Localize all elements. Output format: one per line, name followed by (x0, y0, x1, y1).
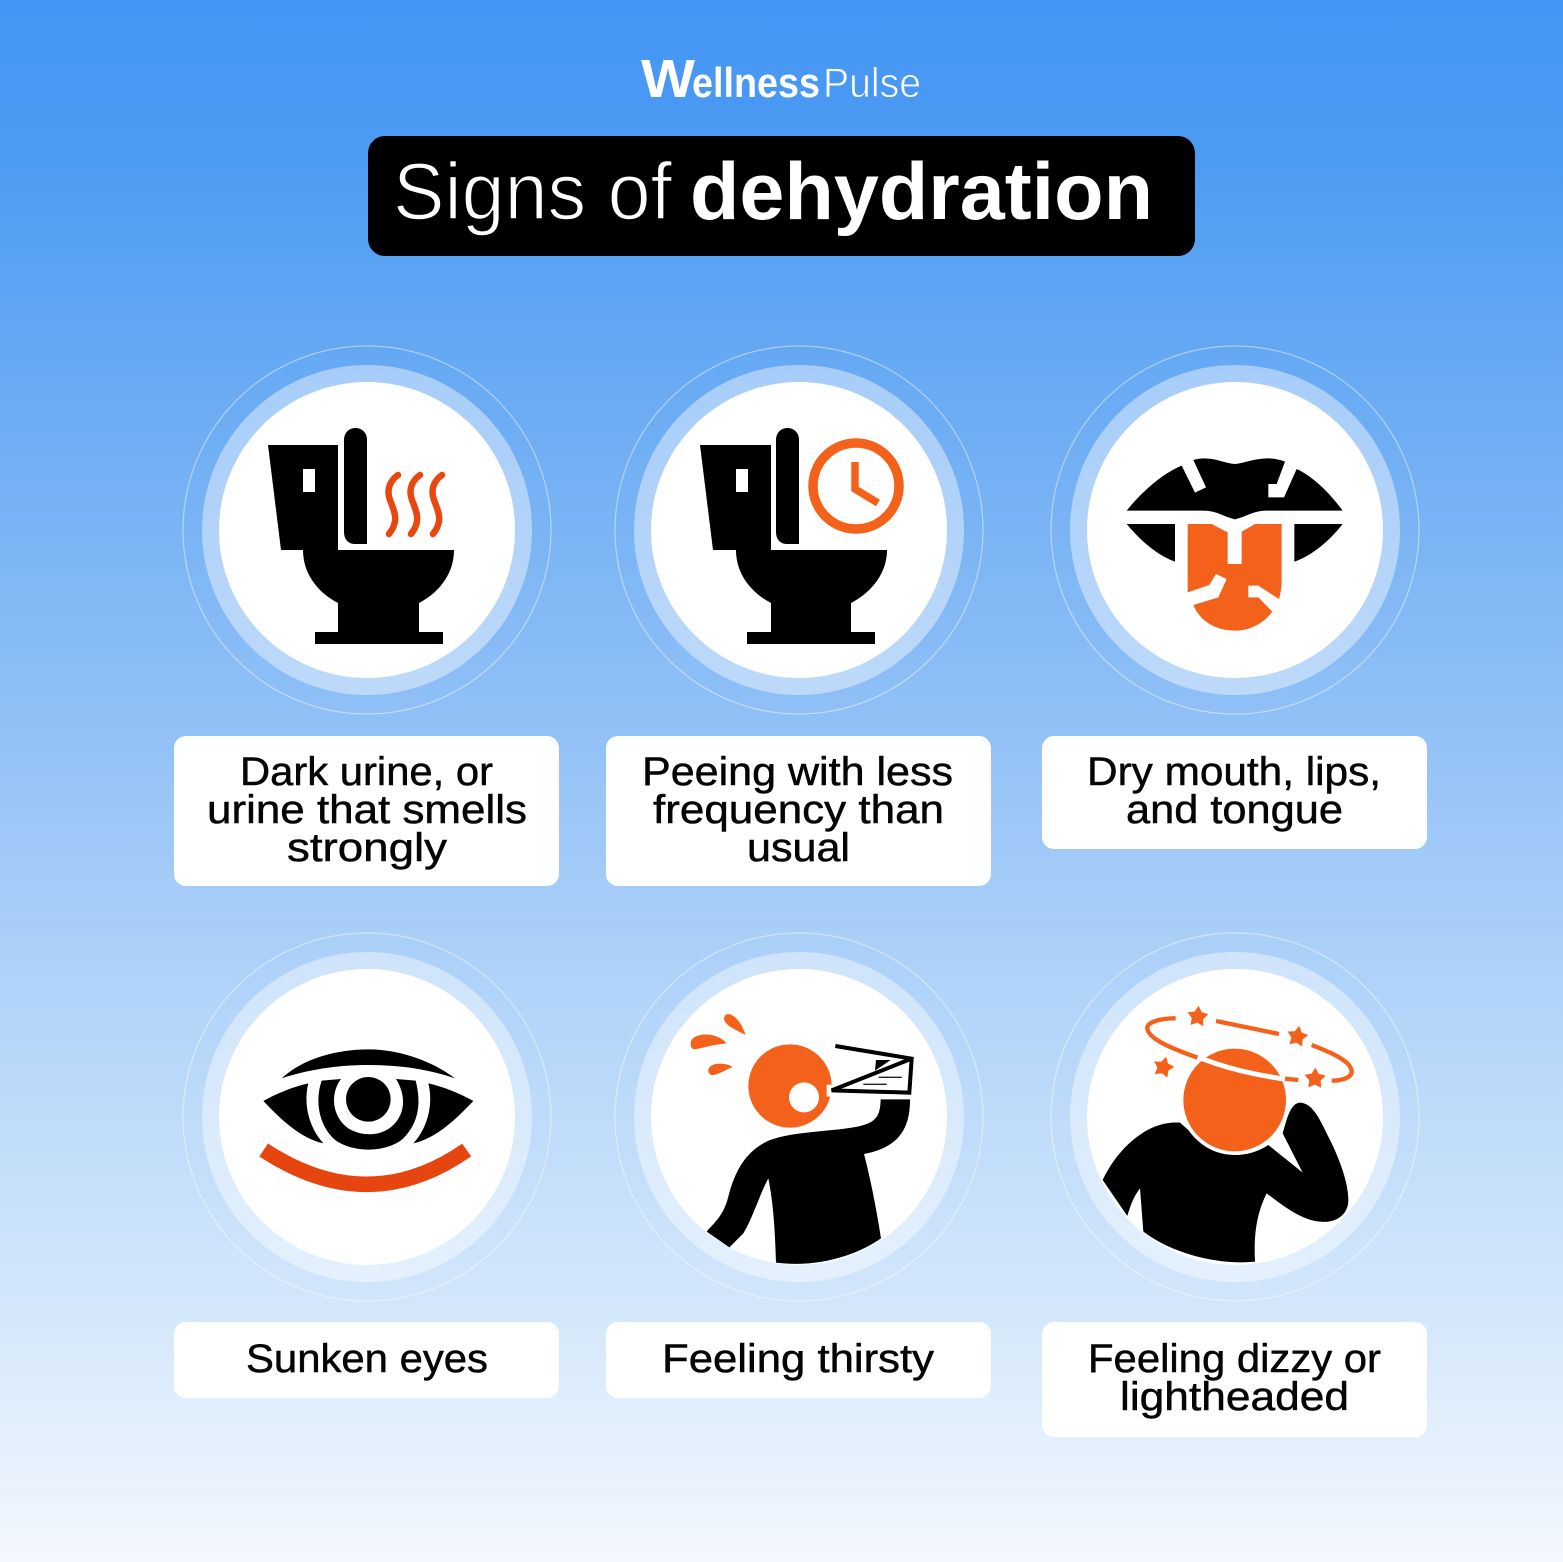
title: Signs of (393, 147, 672, 237)
icon badge: person drinking (615, 933, 983, 1301)
panel: feeling thirsty (606, 933, 991, 1398)
label card (606, 736, 991, 886)
label card: lightheaded (1120, 1375, 1349, 1419)
icon badge: cracked lips and tongue (1051, 346, 1419, 714)
label card: strongly (287, 826, 447, 870)
label card (174, 736, 559, 886)
panel: dizzy (1042, 933, 1427, 1437)
label card: Dry mouth, lips, (1087, 750, 1381, 794)
logo: WellnessPulse: ellness (692, 59, 820, 106)
logo: WellnessPulse: Pulse (823, 59, 921, 106)
label card: Peeing with less (642, 750, 953, 794)
label card (1042, 736, 1427, 849)
logo: WellnessPulse: W (641, 49, 695, 109)
icon badge: toilet with odor (183, 346, 551, 714)
label card: Sunken eyes (246, 1337, 488, 1381)
label card: usual (747, 826, 850, 870)
label card: frequency than (653, 788, 944, 832)
label card: and tongue (1126, 788, 1343, 832)
icon badge: toilet with clock (615, 346, 983, 714)
logo: WellnessPulse (641, 49, 921, 109)
label card: Dark urine, or (240, 750, 493, 794)
label card (174, 1322, 559, 1398)
panel: peeing less often (606, 346, 991, 886)
panel: sunken eyes (174, 933, 559, 1398)
title: dehydration (690, 147, 1153, 237)
icon badge: dizzy person (1051, 933, 1419, 1301)
label card: urine that smells (207, 788, 527, 832)
label card (606, 1322, 991, 1398)
label card: Feeling dizzy or (1088, 1337, 1381, 1381)
panel: dry mouth (1042, 346, 1427, 849)
title (368, 136, 1195, 256)
label card: Feeling thirsty (662, 1337, 934, 1381)
icon badge: sunken eye (183, 933, 551, 1301)
panel: dark urine (174, 346, 559, 886)
label card (1042, 1322, 1427, 1437)
